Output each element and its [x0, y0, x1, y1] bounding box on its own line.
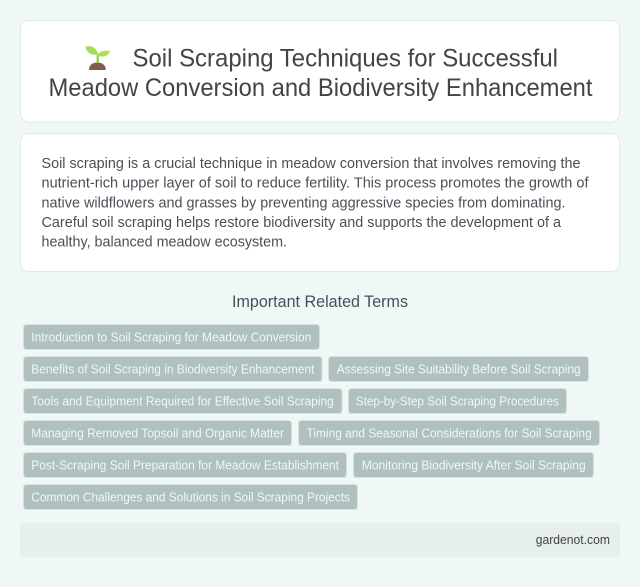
tag: post-scraping	[24, 452, 346, 478]
description text: Soil scraping is a crucial technique in meadow conversion that involves removing the	[42, 156, 580, 172]
tag: timing: Timing and Seasonal Considerations for Soil Scraping	[306, 427, 592, 441]
tag list	[24, 324, 600, 510]
panel: title	[20, 20, 620, 122]
description text: nutrient-rich upper layer of soil to reduce fertility. This process promotes the growth of	[42, 176, 589, 192]
tag: tools	[24, 388, 342, 414]
panel: description	[20, 134, 620, 272]
tag: procedures	[348, 388, 566, 414]
heading: important related terms: Important Related Terms	[232, 293, 408, 311]
tag: benefits	[24, 356, 322, 382]
description text: Careful soil scraping helps restore biodiversity and supports the development of a	[42, 215, 562, 231]
icon: seedling	[86, 46, 110, 70]
tag: monitoring: Monitoring Biodiversity After Soil Scraping	[362, 459, 586, 473]
description text: healthy, balanced meadow ecosystem.	[42, 234, 287, 250]
tag: site suitability	[328, 356, 588, 382]
tag: monitoring	[354, 452, 594, 478]
tag: benefits: Benefits of Soil Scraping in Biodiversity Enhancement	[31, 363, 315, 377]
tag: topsoil	[24, 420, 292, 446]
tag: introduction	[24, 324, 320, 350]
tag: challenges	[24, 484, 358, 510]
title line 1: Soil Scraping Techniques for Successful	[132, 45, 558, 73]
description text	[42, 156, 589, 250]
tag: topsoil: Managing Removed Topsoil and Organic Matter	[31, 427, 284, 441]
tag: introduction: Introduction to Soil Scraping for Meadow Conversion	[31, 331, 311, 345]
tag: site suitability: Assessing Site Suitability Before Soil Scraping	[337, 363, 581, 377]
tag: challenges: Common Challenges and Solutions in Soil Scraping Projects	[31, 491, 350, 505]
footer	[20, 523, 620, 557]
tag: post-scraping: Post-Scraping Soil Preparation for Meadow Establishment	[31, 459, 339, 473]
title line 2: Meadow Conversion and Biodiversity Enhancement	[48, 74, 593, 102]
description text: native wildflowers and grasses by preventing aggressive species from dominating.	[42, 195, 566, 211]
tag: timing	[298, 420, 600, 446]
tag: procedures: Step-by-Step Soil Scraping Procedures	[356, 395, 559, 409]
footer source text: gardenot.com	[536, 533, 610, 547]
tag: tools: Tools and Equipment Required for Effective Soil Scraping	[31, 395, 334, 409]
